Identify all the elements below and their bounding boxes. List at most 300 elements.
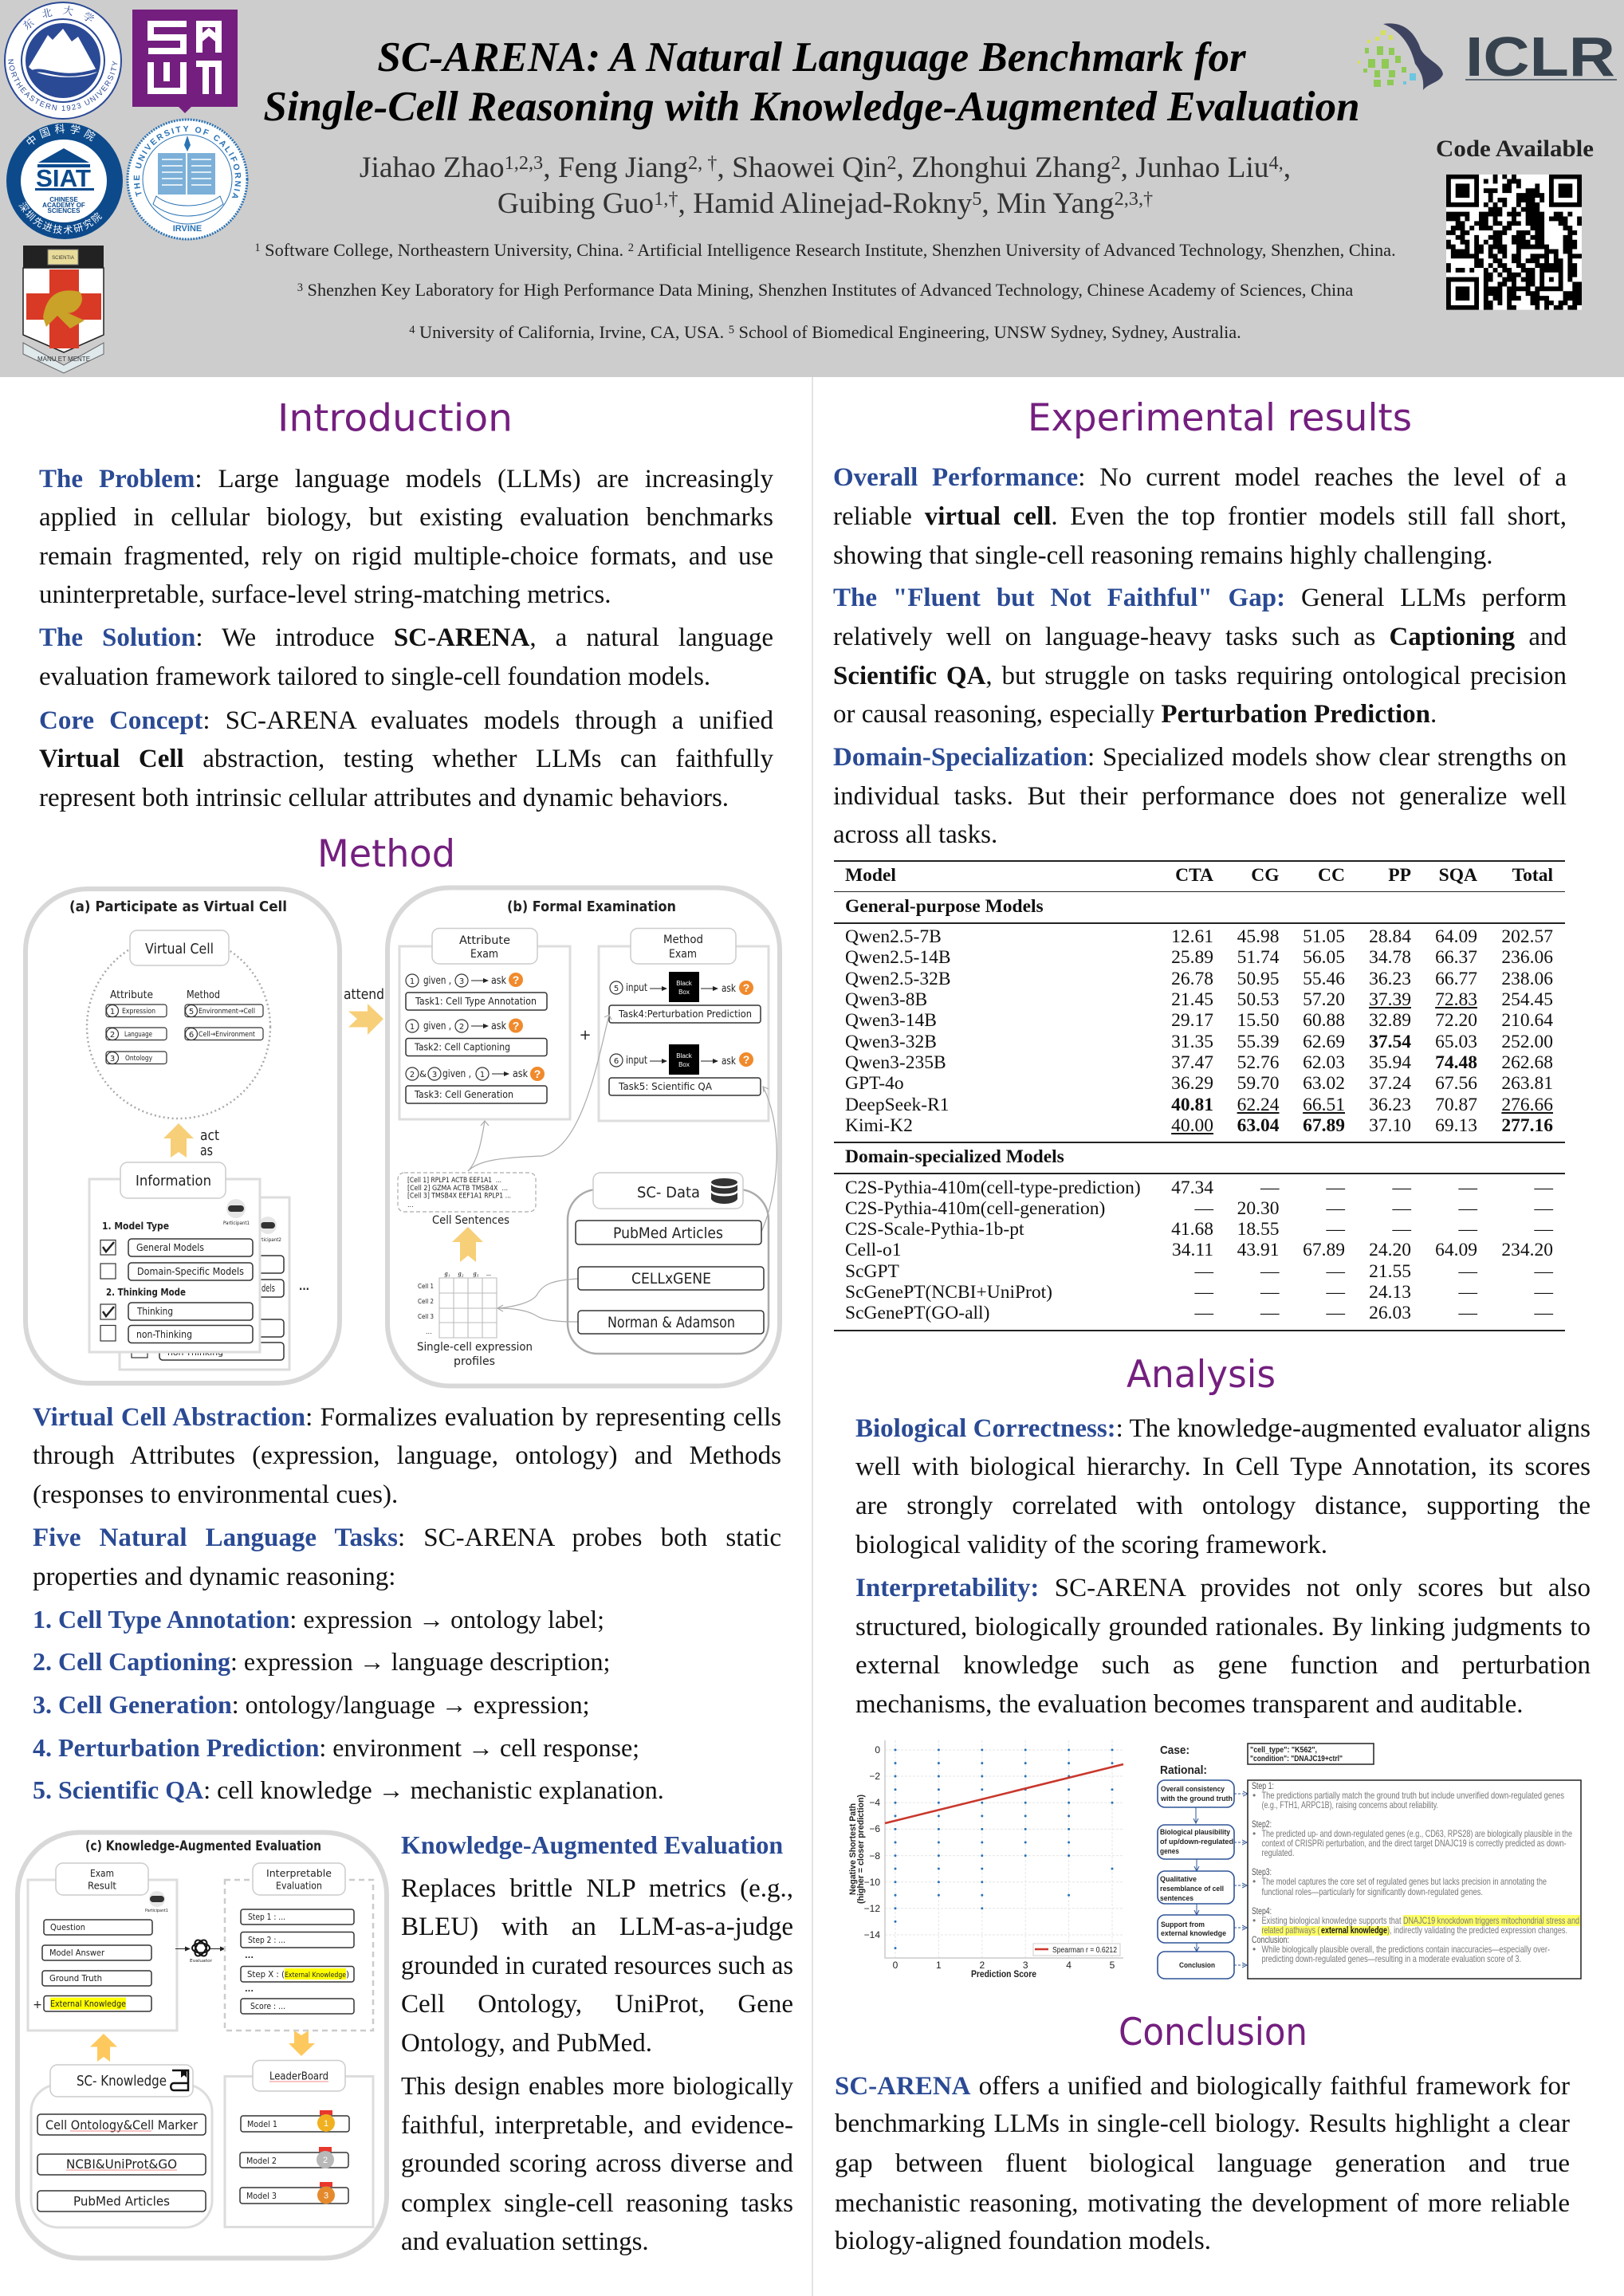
logo: Northeastern University: NORTHEASTERN 1923 UNIVERSITY <box>8 59 118 111</box>
arrow: attend <box>344 986 384 1035</box>
method exam: ? <box>743 981 749 994</box>
attribute exam: given , <box>423 1020 451 1032</box>
case study: rationale flow: Overall consistency <box>1161 1785 1225 1794</box>
rationale text box: regulated. <box>1261 1847 1295 1858</box>
connector arrows <box>468 1015 777 1322</box>
results table: PP <box>1388 865 1411 886</box>
results table: 62.24 <box>1237 1094 1279 1115</box>
affiliations: 1 Software College, Northeastern University, China. 2 Artificial Intelligence Research Institute, Shenzhen University of Advanced Technology, Shenzhen, China. <box>254 240 1396 260</box>
title: SC-ARENA: A Natural Language Benchmark for <box>377 34 1246 81</box>
method exam: Exam <box>669 948 697 961</box>
text: interpretability: external knowledge such as gene function and perturbation <box>855 1651 1591 1680</box>
QR code <box>1446 174 1582 310</box>
text: the problem: remain fragmented, rely on rigid multiple-choice formats, and use <box>39 542 773 571</box>
expression matrix: ... <box>486 1270 491 1277</box>
logo: SUAT <box>132 10 238 113</box>
results table: 28.84 <box>1369 926 1411 947</box>
panel (a): participate as virtual cell: Language <box>124 1031 152 1039</box>
results table: — <box>1194 1303 1213 1323</box>
text: the problem: uninterpretable, surface-level string-matching metrics. <box>39 580 611 609</box>
results table: ScGPT <box>845 1261 899 1282</box>
text: knowledge-augmented evaluation part 1 <box>401 1874 793 2058</box>
rationale text box: Step3: <box>1252 1866 1272 1877</box>
authors <box>360 151 1291 220</box>
rationale text box: (e.g., FTH1, ARPC1B), raising concerns about reliability. <box>1261 1799 1438 1810</box>
panel (a): participate as virtual cell: Method <box>187 989 220 1001</box>
leaderboard: 1 <box>324 2119 328 2129</box>
text: five natural language tasks: Five Natural Language Tasks: SC-ARENA probes both static <box>33 1523 781 1551</box>
rationale text box: Existing biological knowledge supports that <box>1261 1915 1402 1926</box>
results table: 29.17 <box>1171 1010 1213 1031</box>
SC-Data sources: SC- Data <box>637 1184 700 1201</box>
scatter chart: prediction score vs negative shortest path: −12 <box>864 1903 880 1914</box>
text: interpretability: Interpretability: SC-ARENA provides not only scores but also <box>855 1574 1591 1602</box>
SC-Knowledge sources: PubMed Articles <box>73 2194 170 2208</box>
text: virtual cell abstraction: (responses to environmental cues). <box>33 1480 398 1509</box>
exam result: Model Answer <box>49 1948 104 1958</box>
case study: rationale flow: Rational: <box>1160 1763 1207 1777</box>
panel (a): participate as virtual cell: Participant1 <box>223 1221 250 1226</box>
method exam: Black <box>676 1052 693 1060</box>
column divider <box>812 377 813 2296</box>
leaderboard: 2 <box>323 2156 328 2165</box>
authors: Jiahao Zhao1,2,3, Feng Jiang2, †, Shaowei Qin2, Zhonghui Zhang2, Junhao Liu4,, <box>360 151 1291 184</box>
rationale text box: external knowledge <box>1321 1924 1387 1936</box>
results table: Model <box>845 865 896 886</box>
panel (c): knowledge-augmented evaluation: (c) Knowledge-Augmented Evaluation <box>85 1838 321 1854</box>
results table: — <box>1534 1219 1553 1240</box>
results table: 65.03 <box>1435 1032 1477 1052</box>
heading: Analysis: Analysis <box>1127 1353 1276 1397</box>
rationale text box: • <box>1252 1790 1256 1801</box>
results table: Domain-specialized Models <box>845 1146 1064 1167</box>
SC-Knowledge sources: Cell Ontology&Cell Marker <box>45 2117 198 2133</box>
logo: UNSW <box>23 246 104 373</box>
results table: — <box>1534 1303 1553 1323</box>
text: biological correctness: biological validity of the scoring framework. <box>855 1531 1327 1559</box>
panel (a): participate as virtual cell: rticipant2 <box>260 1237 281 1243</box>
results table: 55.46 <box>1303 969 1345 989</box>
panel (a): participate as virtual cell: act <box>200 1127 219 1144</box>
results table: 72.83 <box>1435 989 1477 1010</box>
results table: 50.53 <box>1237 989 1279 1010</box>
text: interpretability <box>855 1574 1591 1719</box>
results table: 55.39 <box>1237 1032 1279 1052</box>
panel (a): participate as virtual cell: non-Thinking <box>136 1329 192 1340</box>
panel (a): participate as virtual cell: Attribute <box>110 989 153 1001</box>
case study: rationale flow: "condition": "DNAJC19+ctrl" <box>1250 1755 1343 1763</box>
results table: — <box>1327 1219 1345 1240</box>
attribute exam: Task1: Cell Type Annotation <box>415 996 537 1007</box>
results table: 62.69 <box>1303 1032 1345 1052</box>
text: knowledge-augmented evaluation part 1: grounded in curated resources such as <box>401 1952 793 1980</box>
method exam: ask <box>722 1056 736 1067</box>
list: five tasks: 2. Cell Captioning: expression → language description; <box>33 1647 610 1676</box>
exam result: Result <box>88 1880 116 1891</box>
logo: UC Irvine <box>126 118 249 241</box>
panel (b): formal examination <box>387 888 780 1386</box>
results table: — <box>1327 1177 1345 1197</box>
case study: rationale flow: Biological plausibility <box>1160 1828 1231 1837</box>
results table: — <box>1459 1177 1477 1197</box>
results table: 34.78 <box>1369 947 1411 968</box>
case study: rationale flow: resemblance of cell <box>1160 1885 1224 1893</box>
rationale text box: Step2: <box>1252 1818 1272 1830</box>
panel (a): participate as virtual cell: non-Thinking <box>167 1347 223 1358</box>
arrow: attend: attend <box>344 986 384 1003</box>
title: Single-Cell Reasoning with Knowledge-Augmented Evaluation <box>263 84 1360 130</box>
logo: SIAT: SIAT <box>36 164 91 192</box>
results table: Qwen2.5-14B <box>845 947 950 968</box>
rationale text box: • <box>1252 1915 1256 1926</box>
results table: 40.00 <box>1171 1115 1213 1136</box>
heading: knowledge-augmented evaluation: Knowledge-Augmented Evaluation <box>401 1830 783 1859</box>
results table: 74.48 <box>1435 1052 1477 1073</box>
list: five tasks: 3. Cell Generation: ontology/language → expression; <box>33 1690 590 1719</box>
method exam: Task5: Scientific QA <box>618 1081 713 1092</box>
attribute exam: Attribute <box>459 934 510 947</box>
affiliations: 4 University of California, Irvine, CA, USA. 5 School of Biomedical Engineering, UNSW Sydney, Sydney, Australia. <box>409 322 1241 342</box>
results table: — <box>1459 1303 1477 1323</box>
attribute exam: ? <box>513 1019 519 1032</box>
results table: 252.00 <box>1501 1032 1553 1052</box>
text: domain specialization <box>833 743 1567 848</box>
results table: — <box>1194 1282 1213 1303</box>
scatter chart: prediction score vs negative shortest path: 0 <box>893 1960 899 1971</box>
results table: 202.57 <box>1501 926 1553 947</box>
leaderboard: Model 3 <box>246 2192 277 2201</box>
results table: CTA <box>1175 865 1213 886</box>
title <box>263 34 1360 130</box>
text: the problem <box>39 465 773 609</box>
scatter chart: prediction score vs negative shortest path: −6 <box>869 1823 880 1834</box>
attribute exam: 2 <box>410 1071 415 1079</box>
case study: rationale flow: of up/down-regulated <box>1160 1838 1233 1846</box>
results table: — <box>1327 1303 1345 1323</box>
results table: — <box>1534 1177 1553 1197</box>
exam result <box>28 1863 177 2031</box>
text: biological correctness: well with biological hierarchy. In Cell Type Annotation, its scores <box>855 1453 1591 1481</box>
results table: Qwen3-32B <box>845 1032 937 1052</box>
results table: 15.50 <box>1237 1010 1279 1031</box>
cell sentences: [Cell 1] RPLP1 ACTB EEF1A1 ... <box>407 1177 501 1185</box>
method exam: Black <box>676 980 693 987</box>
text: overall performance: reliable virtual cell. Even the top frontier models still fall short, <box>833 502 1567 531</box>
results table: Qwen2.5-7B <box>845 926 942 947</box>
text: fluent but not faithful gap: The "Fluent but Not Faithful" Gap: General LLMs perform <box>833 584 1567 612</box>
results table: Qwen3-235B <box>845 1052 946 1073</box>
expression matrix <box>417 1270 533 1368</box>
scatter chart: prediction score vs negative shortest path: 3 <box>1023 1960 1028 1971</box>
logo: UNSW: MANU ET MENTE <box>37 356 90 363</box>
attribute exam: given , <box>442 1068 471 1080</box>
case study: rationale flow: with the ground truth <box>1160 1795 1233 1803</box>
text: conclusion: SC-ARENA offers a unified and biologically faithful framework for <box>835 2072 1570 2101</box>
text: interpretability: structured, biologically grounded rationales. By linking judgments to <box>855 1613 1591 1641</box>
case study: rationale flow: external knowledge <box>1161 1929 1226 1938</box>
results table: 234.20 <box>1501 1240 1553 1260</box>
interpretable evaluation: Evaluation <box>276 1880 322 1891</box>
expression matrix: Cell 2 <box>418 1298 434 1305</box>
panel (a): participate as virtual cell: 1 <box>110 1008 115 1016</box>
scatter chart: prediction score vs negative shortest path: 1 <box>936 1960 942 1971</box>
expression matrix: Cell 3 <box>418 1313 434 1320</box>
results table <box>834 860 1565 1331</box>
SC-Data sources: PubMed Articles <box>613 1225 723 1242</box>
panel (a): participate as virtual cell: 1. Model Type <box>102 1221 169 1232</box>
logo: SIAT <box>6 123 123 239</box>
results table: Qwen3-8B <box>845 989 927 1010</box>
text: domain specialization: individual tasks. But their performance does not generalize well <box>833 781 1567 810</box>
attribute exam: 1 <box>480 1071 485 1079</box>
case study: rationale flow: "cell_type": "K562", <box>1250 1746 1317 1755</box>
method exam: input <box>626 982 647 994</box>
SC-Data sources: CELLxGENE <box>631 1270 711 1288</box>
panel (a): participate as virtual cell: Cell→Environment <box>199 1031 255 1039</box>
text: core concept <box>39 706 773 812</box>
logo: SIAT: 深圳先进技术研究院 <box>18 202 102 234</box>
panel (a): participate as virtual cell <box>26 889 340 1383</box>
results table: 67.89 <box>1303 1240 1345 1260</box>
results table: 47.34 <box>1171 1177 1213 1197</box>
attribute exam: ask <box>491 975 506 987</box>
results table: 66.51 <box>1303 1094 1345 1115</box>
rationale text box: functional roles—particularly for significantly down-regulated genes. <box>1261 1886 1483 1897</box>
heading: Conclusion: Conclusion <box>1119 2011 1307 2054</box>
cell sentences: Cell Sentences <box>432 1214 509 1227</box>
results table: 238.06 <box>1501 969 1553 989</box>
text: the problem: The Problem: Large language models (LLMs) are increasingly <box>39 465 773 493</box>
text: virtual cell abstraction: Virtual Cell Abstraction: Formalizes evaluation by representing cells <box>33 1403 781 1432</box>
interpretable evaluation: Step 2 : ... <box>248 1936 285 1945</box>
text: five natural language tasks: properties and dynamic reasoning: <box>33 1563 395 1591</box>
results table: — <box>1194 1198 1213 1219</box>
results table: — <box>1392 1219 1411 1240</box>
attribute exam: & <box>419 1069 427 1079</box>
results table: — <box>1260 1282 1279 1303</box>
scatter chart: prediction score vs negative shortest path: 5 <box>1110 1960 1115 1971</box>
results table: General-purpose Models <box>845 896 1044 917</box>
results table: 20.30 <box>1237 1198 1279 1219</box>
logo: ICLR: ICLR <box>1465 26 1615 88</box>
heading: code available: Code Available <box>1436 136 1594 162</box>
interpretable evaluation: ... <box>245 1952 254 1960</box>
expression matrix: ... <box>426 1328 432 1335</box>
method exam: 6 <box>614 1057 619 1066</box>
results table: 37.54 <box>1369 1032 1411 1052</box>
rationale text box: Step 1: <box>1252 1780 1274 1791</box>
exam result: Participant1 <box>145 1909 168 1913</box>
text: biological correctness: Biological Correctness:: The knowledge-augmented evaluator aligns <box>855 1414 1591 1443</box>
scatter chart: prediction score vs negative shortest path: 2 <box>979 1960 985 1971</box>
panel (a): participate as virtual cell: as <box>200 1142 213 1159</box>
results table: — <box>1534 1198 1553 1219</box>
attribute exam: ask <box>491 1020 506 1032</box>
results table: 277.16 <box>1501 1115 1553 1136</box>
expression matrix: Cell 1 <box>418 1283 434 1290</box>
text: knowledge-augmented evaluation part 2: complex single-cell reasoning tasks <box>401 2189 793 2218</box>
text: knowledge-augmented evaluation part 1: Replaces brittle NLP metrics (e.g., <box>401 1874 793 1903</box>
results table: 37.24 <box>1369 1073 1411 1094</box>
scatter chart: prediction score vs negative shortest path: −2 <box>869 1771 880 1782</box>
results table: 26.78 <box>1171 969 1213 989</box>
scatter chart: prediction score vs negative shortest path: (higher = closer prediction) <box>856 1795 866 1904</box>
results table: 36.23 <box>1369 1094 1411 1115</box>
results table: Qwen3-14B <box>845 1010 937 1031</box>
results table: 67.56 <box>1435 1073 1477 1094</box>
case study: rationale flow: Conclusion <box>1179 1961 1215 1970</box>
case study: rationale flow: genes <box>1160 1847 1179 1856</box>
text: knowledge-augmented evaluation part 1: Ontology, and PubMed. <box>401 2029 652 2058</box>
method exam: Box <box>678 1061 690 1068</box>
method exam: ? <box>743 1053 749 1066</box>
panel (a): participate as virtual cell: 3 <box>110 1055 115 1063</box>
logo: SIAT: CHINESE <box>49 196 78 203</box>
text: core concept: Virtual Cell abstraction, testing whether LLMs can faithfully <box>39 745 773 773</box>
rationale text box: predicting down-regulated genes—resulting in a moderate evaluation score of 3. <box>1261 1953 1521 1964</box>
results table: Kimi-K2 <box>845 1115 913 1136</box>
results table: 21.55 <box>1369 1261 1411 1282</box>
text: knowledge-augmented evaluation part 2: faithful, interpretable, and evidence- <box>401 2111 793 2140</box>
results table: 69.13 <box>1435 1115 1477 1136</box>
results table: 31.35 <box>1171 1032 1213 1052</box>
results table: 51.05 <box>1303 926 1345 947</box>
results table: — <box>1534 1261 1553 1282</box>
text: core concept: represent both intrinsic cellular attributes and dynamic behaviors. <box>39 783 729 812</box>
leaderboard: 3 <box>324 2191 328 2200</box>
panel (a): participate as virtual cell: Virtual Cell <box>145 941 214 957</box>
SC-Data sources: Norman & Adamson <box>608 1314 735 1331</box>
text: conclusion: gap between fluent biological language generation and true <box>835 2149 1570 2178</box>
results table: — <box>1459 1219 1477 1240</box>
method exam: 5 <box>614 985 619 993</box>
heading: Method: Method <box>317 832 455 876</box>
panel (c): knowledge-augmented evaluation <box>18 1832 387 2258</box>
results table: 64.09 <box>1435 926 1477 947</box>
results table: GPT-4o <box>845 1073 904 1094</box>
header band <box>0 0 1624 377</box>
scatter chart: prediction score vs negative shortest path: −14 <box>864 1929 880 1940</box>
results table: CG <box>1251 865 1279 886</box>
expression matrix: profiles <box>454 1355 495 1368</box>
method exam: ask <box>722 983 736 995</box>
text: overall performance: showing that single-cell reasoning remains highly challenging. <box>833 541 1493 570</box>
leaderboard: Model 1 <box>247 2120 277 2129</box>
results table: DeepSeek-R1 <box>845 1094 950 1115</box>
results table: 37.47 <box>1171 1052 1213 1073</box>
case study: rationale flow: Qualitative <box>1160 1875 1197 1884</box>
text: knowledge-augmented evaluation part 2 <box>401 2072 793 2256</box>
interpretable evaluation: Score : ... <box>250 2002 285 2011</box>
text: core concept: Core Concept: SC-ARENA evaluates models through a unified <box>39 706 773 735</box>
logo: SIAT: SCIENCES <box>48 207 81 214</box>
attribute exam: 1 <box>410 977 415 986</box>
rationale text box: Conclusion: <box>1252 1934 1289 1945</box>
results table: 67.89 <box>1303 1115 1345 1136</box>
exam result: Exam <box>90 1868 114 1879</box>
text: knowledge-augmented evaluation part 2: and evaluation settings. <box>401 2227 649 2256</box>
text: fluent but not faithful gap <box>833 584 1567 729</box>
method exam: Task4:Perturbation Prediction <box>618 1008 752 1020</box>
text: conclusion: biology-aligned foundation models. <box>835 2227 1211 2255</box>
panel (a): participate as virtual cell: (a) Participate as Virtual Cell <box>69 898 287 915</box>
results table: CC <box>1318 865 1345 886</box>
results table: C2S-Pythia-410m(cell-generation) <box>845 1198 1105 1219</box>
interpretable evaluation: ) <box>346 1970 349 1980</box>
results table: 56.05 <box>1303 947 1345 968</box>
results table: 12.61 <box>1171 926 1213 947</box>
results table: 52.76 <box>1237 1052 1279 1073</box>
panel (a): participate as virtual cell: 2. Thinking Mode <box>106 1287 186 1298</box>
list: five tasks: 4. Perturbation Prediction: environment → cell response; <box>33 1733 639 1762</box>
text: five natural language tasks <box>33 1523 781 1591</box>
results table: 63.02 <box>1303 1073 1345 1094</box>
results table: — <box>1459 1261 1477 1282</box>
results table: 24.20 <box>1369 1240 1411 1260</box>
expression matrix: g₁ <box>445 1270 450 1277</box>
list: five tasks: 5. Scientific QA: cell knowledge → mechanistic explanation. <box>33 1775 664 1803</box>
attribute exam: ask <box>513 1068 528 1080</box>
text: conclusion: mechanistic reasoning, motivating the development of more reliable <box>835 2189 1570 2218</box>
results table: 36.29 <box>1171 1073 1213 1094</box>
results table: 236.06 <box>1501 947 1553 968</box>
panel (a): participate as virtual cell: Expression <box>122 1008 155 1016</box>
exam result: Ground Truth <box>49 1973 102 1983</box>
results table: 45.98 <box>1237 926 1279 947</box>
legend: Spearman r = 0.6212 <box>1052 1946 1117 1955</box>
results table: — <box>1459 1198 1477 1219</box>
scatter chart: prediction score vs negative shortest path: 4 <box>1066 1960 1072 1971</box>
results table: 263.81 <box>1501 1073 1553 1094</box>
scatter chart: prediction score vs negative shortest path <box>848 1740 1123 1980</box>
attribute exam: ? <box>534 1067 541 1080</box>
results table: ScGenePT(GO-all) <box>845 1303 989 1323</box>
panel (a): participate as virtual cell: 2 <box>110 1031 115 1040</box>
leaderboard <box>225 2060 373 2227</box>
rationale text box: • <box>1252 1828 1256 1839</box>
rationale text box: ), indirectly validating the predicted expression changes. <box>1387 1924 1567 1936</box>
results table: 57.20 <box>1303 989 1345 1010</box>
text: overall performance <box>833 463 1567 570</box>
scatter chart: prediction score vs negative shortest path: Negative Shortest Path <box>848 1803 858 1895</box>
results table: C2S-Scale-Pythia-1b-pt <box>845 1219 1024 1240</box>
exam result: Question <box>50 1922 85 1932</box>
attribute exam: Exam <box>470 948 498 961</box>
panel (a): participate as virtual cell: Thinking <box>136 1306 173 1317</box>
results table: 60.88 <box>1303 1010 1345 1031</box>
text: the solution: evaluation framework tailored to single-cell foundation models. <box>39 662 710 691</box>
results table: 64.09 <box>1435 1240 1477 1260</box>
evaluator icon: Evaluator <box>190 1959 213 1964</box>
text: virtual cell abstraction <box>33 1403 781 1509</box>
results table: 59.70 <box>1237 1073 1279 1094</box>
method exam: Method <box>663 934 703 946</box>
logo: UNSW: SCIENTIA <box>52 256 74 261</box>
results table: 51.74 <box>1237 947 1279 968</box>
attribute exam <box>399 928 570 1119</box>
results table: 25.89 <box>1171 947 1213 968</box>
method exam: Box <box>678 989 690 996</box>
results table: 210.64 <box>1501 1010 1553 1031</box>
SC-Knowledge sources <box>31 2065 212 2227</box>
text: knowledge-augmented evaluation part 2: This design enables more biologically <box>401 2072 793 2100</box>
scatter chart: prediction score vs negative shortest path: 0 <box>875 1744 880 1755</box>
heading: Experimental results: Experimental results <box>1028 396 1412 440</box>
results table: SQA <box>1439 865 1477 886</box>
case study: rationale flow: sentences <box>1160 1894 1193 1903</box>
results table: — <box>1260 1261 1279 1282</box>
results table: — <box>1534 1282 1553 1303</box>
